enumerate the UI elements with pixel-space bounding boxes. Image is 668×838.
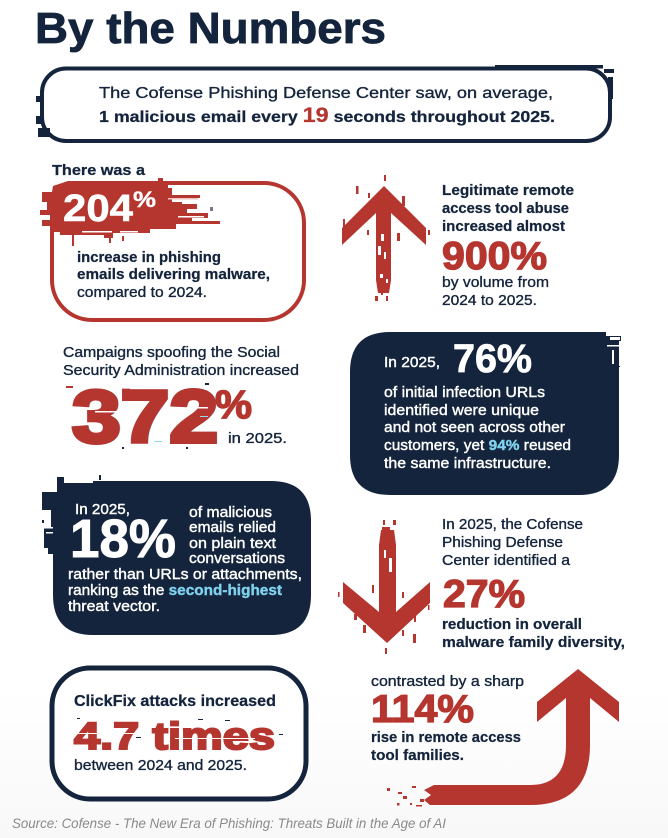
panel: 204% malware increase	[40, 163, 304, 320]
glitch banner with 204%: %	[133, 187, 156, 212]
source note: Source: Cofense - The New Era of Phishing: Threats Built in the Age of AI	[12, 815, 446, 831]
body text: increase in phishing	[77, 250, 221, 266]
text: remote access tool abuse: increased almost	[442, 219, 565, 235]
icon: glitch up arrow	[342, 175, 430, 301]
text: remote access tool abuse: Legitimate remote	[442, 183, 574, 199]
panel: ClickFix attacks	[52, 668, 306, 799]
stat: 372%: %	[215, 383, 252, 427]
text: malware family diversity: malware family diversity,	[442, 635, 625, 651]
text: malware family diversity: reduction in overall	[442, 617, 582, 633]
text: social security campaigns: Security Administration increased	[63, 363, 299, 379]
panel: 76% unique URLs: of initial infection URLs	[384, 385, 545, 401]
panel: 18% plain text: on plain text	[189, 536, 276, 552]
text: social security campaigns: Campaigns spoofing the Social	[63, 345, 280, 361]
stat: 372%: 372	[72, 375, 218, 458]
stat: 372%	[66, 375, 252, 458]
text: malware family diversity: Center identified a	[442, 553, 571, 569]
glitch banner with 204%: 204	[63, 188, 133, 230]
text: malware family diversity: In 2025, the Cofense	[442, 517, 583, 533]
panel: 76% unique URLs: the same infrastructure.	[384, 456, 551, 472]
text: social security campaigns	[63, 345, 299, 458]
stat: 4.7 times: 4.7 times	[74, 716, 275, 758]
icon: glitch down arrow	[338, 520, 430, 654]
panel: 18% plain text: threat vector.	[68, 599, 160, 615]
panel: 76% unique URLs: customers, yet 94% reused	[384, 438, 571, 454]
text: remote access tool abuse: 2024 to 2025.	[442, 293, 537, 309]
panel: 76% unique URLs: identified were unique	[384, 403, 539, 419]
callout: average malicious email rate: The Cofense Phishing Defense Center saw, on average,	[99, 85, 553, 102]
stat: 372%: 372	[73, 375, 219, 458]
text: remote access tool abuse: access tool abuse	[442, 201, 569, 217]
text: malware family diversity	[442, 517, 625, 651]
panel: ClickFix attacks: between 2024 and 2025.	[74, 758, 247, 774]
panel: 18% plain text	[42, 475, 311, 635]
stat: 18%: 18%	[70, 509, 176, 569]
body text: compared to 2024.	[77, 285, 207, 301]
panel: ClickFix attacks: ClickFix attacks increased	[74, 693, 276, 710]
stat: 76%: 76%	[453, 337, 532, 381]
text: malware family diversity: Phishing Defense	[442, 535, 563, 551]
panel: 18% plain text: ranking as the second-highest	[68, 583, 282, 599]
panel: 18% plain text: of malicious	[189, 505, 272, 521]
body text: emails delivering malware,	[77, 267, 270, 283]
panel: 18% plain text: In 2025,	[75, 502, 130, 518]
text: social security campaigns: in 2025.	[228, 431, 287, 447]
panel: 76% unique URLs	[350, 332, 621, 495]
stat: 27%: 27%	[443, 573, 525, 616]
callout: average malicious email rate: 1 malicious email every 19 seconds throughout 2025.	[99, 104, 555, 127]
title: By the Numbers	[35, 4, 386, 53]
text: remote access families: rise in remote access	[371, 730, 521, 746]
stat: 114%: 114%	[371, 688, 474, 731]
heading: there was a: There was a	[52, 163, 146, 179]
text: remote access tool abuse: by volume from	[442, 275, 549, 291]
body text	[77, 250, 270, 301]
glitch banner with 204%	[40, 178, 220, 248]
panel: 76% unique URLs: and not seen across other	[384, 420, 565, 436]
callout: average malicious email rate	[36, 65, 614, 141]
panel: 18% plain text: emails relied	[189, 520, 276, 536]
text: remote access tool abuse	[442, 183, 574, 309]
panel: 18% plain text: rather than URLs or attachments,	[68, 567, 302, 583]
text: remote access families	[371, 674, 524, 764]
panel: 18% plain text: conversations	[189, 551, 285, 567]
stat: 900%: 900%	[442, 235, 547, 278]
text: remote access families: tool families.	[371, 748, 464, 764]
icon: curved up arrow	[387, 669, 619, 806]
text: remote access families: contrasted by a sharp	[371, 674, 524, 690]
panel: 76% unique URLs: In 2025,	[384, 355, 440, 371]
